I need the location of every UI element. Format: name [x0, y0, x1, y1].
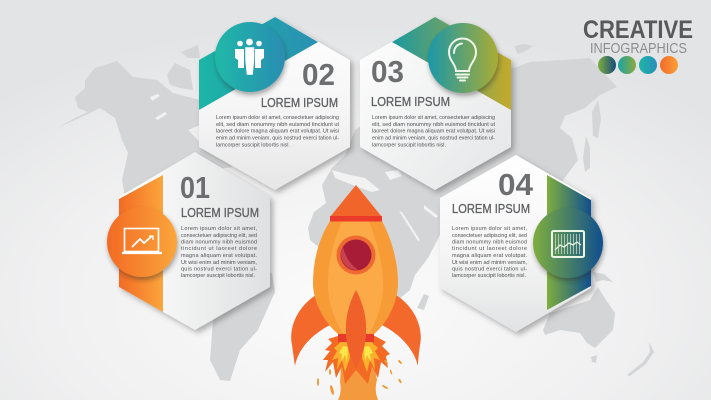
body text 02: elit, sed diam nonummy nibh euismod tincidunt ut — [216, 122, 339, 128]
body text 03: enim ad minim veniam, quis nostrud exerci tation ul- — [372, 136, 495, 142]
map seas — [150, 94, 438, 241]
panel: hexagon 03 — [360, 17, 511, 190]
world map — [57, 44, 654, 381]
body text 02: Lorem ipsum dolor sit amet, consectetuer adipiscing — [216, 115, 339, 121]
body text 03: lamcorper suscipit lobortis nisl. — [372, 142, 446, 148]
nose stripe — [330, 216, 382, 222]
body text 03: laoreet dolore magna aliquam erat volutpat. Ut wisi — [372, 128, 495, 134]
body text 01: magna aliquam erat volutpat. — [181, 253, 257, 259]
body text 02: enim ad minim veniam, quis nostrud exerci tation ul- — [216, 136, 339, 142]
body text 01 — [181, 226, 257, 279]
body text 01: tincidunt ut laoreet dolore — [181, 246, 257, 252]
body text 01: quis nostrud exerci tation ul- — [181, 266, 257, 272]
nozzle — [338, 334, 374, 342]
panel: hexagon 01 — [107, 152, 270, 330]
number 03: 03 — [371, 54, 404, 89]
body text 01: consectetuer adipiscing elit, sed — [181, 233, 257, 239]
heading 02: LOREM IPSUM — [261, 95, 338, 110]
number 04: 04 — [498, 167, 534, 202]
body text 01: diam nonummy nibh euismod — [181, 240, 257, 246]
left fin — [291, 295, 332, 366]
band: green blue — [547, 175, 591, 310]
body text 04: lamcorper suscipit lobortis nisl. — [452, 273, 526, 279]
number 01: 01 — [180, 170, 210, 205]
circle icon badge 04 — [533, 208, 603, 278]
icon: people — [235, 39, 264, 75]
flames — [323, 336, 390, 384]
band: teal olive — [392, 17, 511, 110]
body text 04: Ut wisi enim ad minim veniam, — [452, 260, 527, 266]
rocket — [291, 185, 421, 400]
logo title: CREATIVE — [583, 16, 693, 44]
body text 04: tincidunt ut laoreet dolore — [452, 246, 527, 252]
body text 04: quis nostrud exerci tation ul- — [452, 266, 527, 272]
heading 04: LOREM IPSUM — [452, 201, 530, 216]
icon: laptop chart — [122, 228, 162, 253]
body — [313, 221, 398, 334]
body text 04: Lorem ipsum dolor sit amet, — [452, 226, 527, 232]
panel: hexagon 04 — [440, 155, 603, 332]
heading 01: LOREM IPSUM — [181, 205, 259, 220]
right fin — [380, 295, 421, 366]
sparks — [317, 359, 402, 395]
body text 02: lamcorper suscipit lobortis nisl. — [216, 142, 290, 148]
logo dots — [598, 56, 678, 74]
icon: monitor chart — [552, 231, 584, 257]
exhaust trail — [338, 365, 378, 400]
panel: hexagon 02 — [199, 17, 350, 190]
body text 01: lamcorper suscipit lobortis nisl. — [181, 273, 255, 279]
body text 03: elit, sed diam nonummy nibh euismod tincidunt ut — [372, 122, 495, 128]
body text 01: Ut wisi enim ad minim veniam, — [181, 260, 257, 266]
circle icon badge 01 — [107, 207, 177, 277]
band: orange — [119, 175, 163, 312]
heading 03: LOREM IPSUM — [371, 94, 450, 109]
logo — [583, 16, 693, 74]
circle icon badge 03 — [428, 23, 498, 93]
number 02: 02 — [302, 57, 335, 92]
body text 01: Lorem ipsum dolor sit amet, — [181, 226, 257, 232]
centre fin — [346, 290, 366, 369]
body text 03 — [372, 115, 495, 148]
icon: light bulb — [449, 38, 476, 80]
body text 04: consectetuer adipiscing elit, sed — [452, 233, 527, 239]
body text 03: Lorem ipsum dolor sit amet, consectetuer adipiscing — [372, 115, 495, 121]
body highlight — [328, 221, 383, 334]
nose cone — [330, 185, 382, 217]
body text 02: laoreet dolore magna aliquam erat volutpat. Ut wisi — [216, 128, 339, 134]
body text 04: magna aliquam erat volutpat. — [452, 253, 527, 259]
body text 04 — [452, 226, 527, 279]
band: teal — [199, 17, 318, 110]
circle icon badge 02 — [215, 22, 285, 92]
logo subtitle: INFOGRAPHICS — [590, 40, 687, 57]
window — [336, 236, 376, 274]
body text 02 — [216, 115, 339, 148]
body text 04: diam nonummy nibh euismod — [452, 240, 527, 246]
